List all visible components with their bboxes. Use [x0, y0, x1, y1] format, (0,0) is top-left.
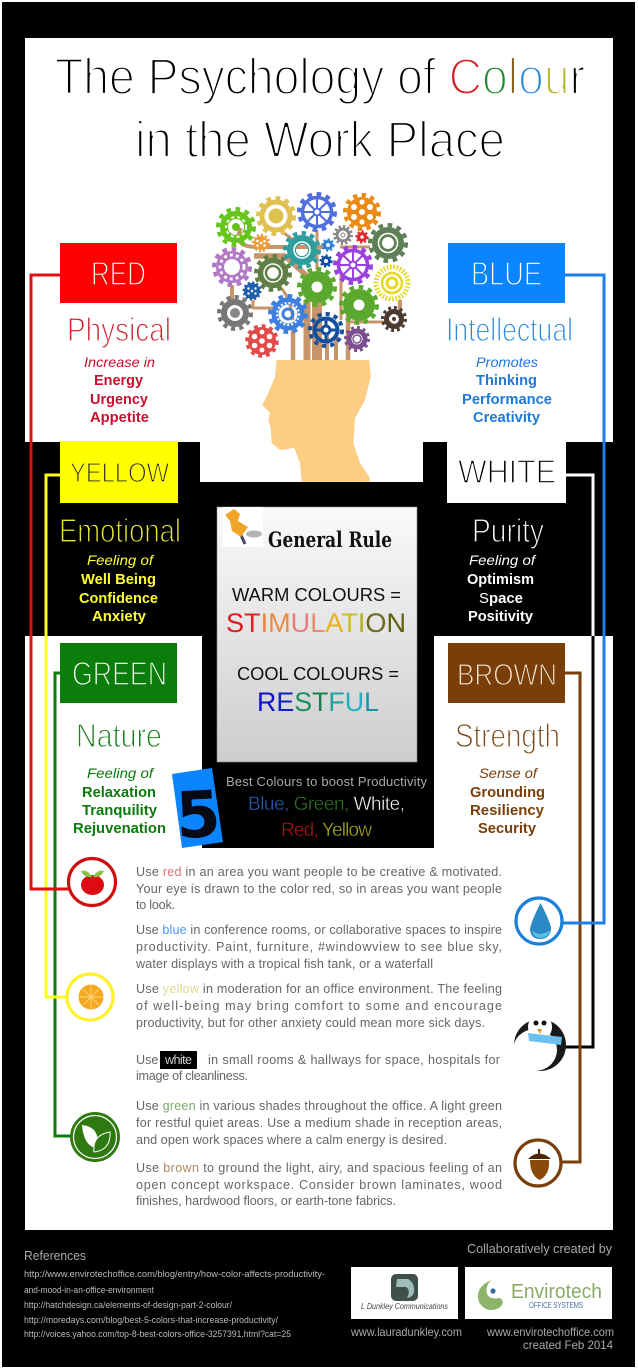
panel: red: Increase in: [84, 354, 155, 370]
panel: green: Feeling of: [87, 765, 155, 781]
logo: Envirotech: [465, 1267, 612, 1319]
connector: green to leaf: [55, 673, 71, 1136]
panel: yellow: [59, 441, 181, 625]
connector: yellow to orange: [46, 475, 66, 997]
references: http://www.envirotechoffice.com/blog/entry/how-color-affects-productivity-: [24, 1269, 325, 1280]
text: use white: in small rooms & hallways for space, hospitals for: [208, 1053, 500, 1067]
panel: green: GREEN: [72, 655, 167, 692]
panel: blue: Creativity: [473, 410, 540, 426]
panel: yellow: YELLOW: [70, 457, 169, 488]
panel: yellow: Confidence: [79, 591, 158, 607]
gear: small navy: [320, 256, 332, 266]
panel: white: WHITE: [458, 453, 556, 490]
icon: orange slice: [67, 974, 113, 1020]
gear: navy dotted: [244, 282, 260, 300]
icon: head with gear tree: [214, 194, 408, 482]
text: use brown: Use brown to ground the light, airy, and spacious feeling of an: [136, 1161, 502, 1175]
text: use green: for restful quiet areas. Use a medium shade in reception areas,: [136, 1116, 502, 1130]
connector: blue to drop: [563, 275, 604, 923]
references: http://moredays.com/blog/best-5-colors-that-increase-productivity/: [24, 1315, 278, 1326]
panel: green: Rejuvenation: [73, 821, 166, 837]
references: http://voices.yahoo.com/top-8-best-colors-office-3257391.html?cat=25: [24, 1329, 291, 1340]
logo: Envirotech: Envirotech: [511, 1281, 602, 1303]
gear: slate green: [370, 225, 406, 261]
text: use green: [136, 1099, 502, 1147]
gear: moss green: [256, 256, 290, 290]
text: use green: and open work spaces where a calm energy is desired.: [136, 1133, 447, 1147]
panel: red: Urgency: [90, 392, 148, 408]
text: use green: Use green in various shades throughout the office. A light green: [136, 1099, 502, 1113]
panel: brown: BROWN: [457, 657, 557, 692]
panel: red: Energy: [94, 373, 143, 389]
panel: brown: Resiliency: [470, 803, 544, 819]
text: use yellow: Use yellow in moderation for an office environment. The feeling: [136, 982, 502, 996]
connector: white to penguin: [565, 475, 593, 1047]
gear: gray: [219, 297, 251, 329]
gear: lime: [218, 209, 254, 245]
credits: www.lauradunkley.com: [350, 1325, 462, 1339]
icon: penguin: [513, 1014, 566, 1071]
text: use brown: finishes, hardwood floors, or earth-tone fabrics.: [136, 1194, 396, 1208]
text: use red: to look.: [136, 898, 175, 912]
panel: blue: Thinking: [476, 373, 537, 389]
gear: small orange: [253, 235, 269, 251]
panel: red: [60, 243, 177, 426]
credits: Collaboratively created by: [467, 1241, 612, 1256]
panel: green: [60, 643, 177, 837]
gear: dark purple: [346, 328, 368, 350]
panel: brown: Security: [478, 821, 536, 837]
references: http://hatchdesign.ca/elements-of-design-part-2-colour/: [24, 1300, 232, 1311]
panel: white: Purity: [472, 512, 544, 549]
logo: L Dunkley Communications: [351, 1267, 458, 1319]
text: best colours: Best Colours to boost Productivity: [226, 774, 428, 789]
credits: [350, 1241, 614, 1352]
icon: acorn: [515, 1140, 561, 1186]
gear: yellow sun: [376, 267, 408, 299]
title: The Psychology of Colour: [55, 48, 585, 105]
icon: leaf: [70, 1112, 120, 1162]
panel: brown: Strength: [455, 717, 560, 754]
gear: violet spokes: [335, 247, 371, 283]
gear: dark brown: [382, 308, 406, 330]
text: use white: image of cleanliness.: [136, 1069, 248, 1083]
text: best colours: Red, Yellow: [281, 820, 372, 841]
panel: white: Space: [479, 591, 523, 607]
panel: blue: Performance: [462, 392, 552, 408]
text: use yellow: productivity, but for other anxiety could mean more sick days.: [136, 1016, 485, 1030]
panel: general rule: WARM COLOURS =: [232, 584, 401, 605]
panel: red: Appetite: [90, 410, 149, 426]
gear: orange: [345, 195, 379, 229]
title: [55, 48, 585, 168]
panel: blue: BLUE: [471, 255, 542, 292]
panel: general rule: [217, 507, 417, 762]
panel: lower white area: [25, 636, 613, 1230]
text: use brown: [136, 1161, 502, 1208]
gear: green center: [299, 269, 335, 305]
panel: white: Feeling of: [469, 552, 537, 568]
gear: blue spokes: [299, 194, 335, 230]
logo: L Dunkley Communications: L Dunkley Communications: [361, 1302, 448, 1311]
text: use red: Your eye is drawn to the color red, so in areas you want people: [136, 882, 502, 896]
panel: blue: Intellectual: [446, 311, 573, 348]
gear: navy: [310, 314, 342, 346]
connector: brown to acorn: [562, 673, 580, 1162]
panel: yellow: Feeling of: [87, 552, 155, 568]
gear: purple: [214, 249, 250, 285]
text: use yellow: [136, 982, 502, 1030]
panel: yellow: Anxiety: [92, 609, 146, 625]
gear: small red: [356, 232, 368, 242]
panel: brown: [448, 643, 565, 837]
panel: general rule: STIMULATION: [226, 608, 406, 638]
text: use white: [136, 1051, 500, 1083]
gear: teal: [285, 233, 319, 267]
panel: general rule: COOL COLOURS =: [237, 663, 399, 684]
text: use blue: productivity. Paint, furniture, #windowview to see blue sky,: [136, 940, 502, 954]
panel: blue: [446, 243, 573, 426]
panel: white: Positivity: [468, 609, 533, 625]
gear: red: [247, 326, 277, 356]
credits: www.envirotechoffice.com: [486, 1325, 614, 1339]
panel: red: Physical: [67, 311, 171, 348]
connector: red to apple: [31, 275, 68, 889]
logo: Envirotech: OFFICE SYSTEMS: [529, 1301, 583, 1310]
panel: green: Tranquility: [82, 803, 157, 819]
text: use red: Use red in an area you want people to be creative & motivated.: [136, 865, 502, 879]
heading: general rule: General Rule: [268, 527, 392, 552]
text: use white: Use: [136, 1053, 158, 1067]
gear: bright blue: [270, 296, 306, 332]
text: best colours: Blue, Green, White,: [248, 794, 405, 815]
text: use white: white: [164, 1053, 192, 1067]
panel: yellow: Well Being: [81, 572, 156, 588]
title: in the Work Place: [135, 111, 505, 168]
credits: created Feb 2014: [523, 1338, 613, 1352]
gear: small gray: [334, 226, 352, 244]
text: use blue: water displays with a tropical fish tank, or a waterfall: [135, 957, 433, 971]
panel: red: RED: [91, 255, 146, 292]
text: use brown: open concept workspace. Consider brown laminates, wood: [136, 1178, 502, 1192]
references: and-mood-in-an-office-environment: [24, 1285, 154, 1296]
panel: blue: Promotes: [476, 354, 538, 370]
icon: apple: [68, 858, 116, 906]
head silhouette: [262, 360, 371, 482]
panel: white: [447, 442, 566, 625]
panel: green: Relaxation: [82, 785, 156, 801]
panel: general rule: RESTFUL: [257, 687, 379, 717]
text: use yellow: of well-being may bring comfort to some and encourage: [136, 999, 502, 1013]
text: use blue: Use blue in conference rooms, or collaborative spaces to inspire: [136, 923, 502, 937]
gear: green right: [341, 287, 377, 323]
panel: brown: Sense of: [479, 765, 539, 781]
badge: 5: 5: [174, 778, 222, 854]
gear: small blue: [322, 240, 334, 250]
icon: water drop: [516, 898, 562, 944]
references: References: [24, 1248, 86, 1263]
panel: green: Nature: [76, 717, 162, 754]
icon: push pin: [223, 507, 263, 547]
text: use red: [136, 865, 502, 912]
panel: white: Optimism: [467, 572, 534, 588]
text: best colours: [226, 774, 428, 841]
panel: top white area: [25, 38, 613, 482]
gear branches: [232, 228, 400, 360]
panel: brown: Grounding: [470, 785, 545, 801]
gear: gold: [258, 198, 294, 234]
references: [24, 1248, 325, 1340]
text: use blue: [135, 923, 502, 971]
panel: yellow: Emotional: [59, 512, 181, 549]
